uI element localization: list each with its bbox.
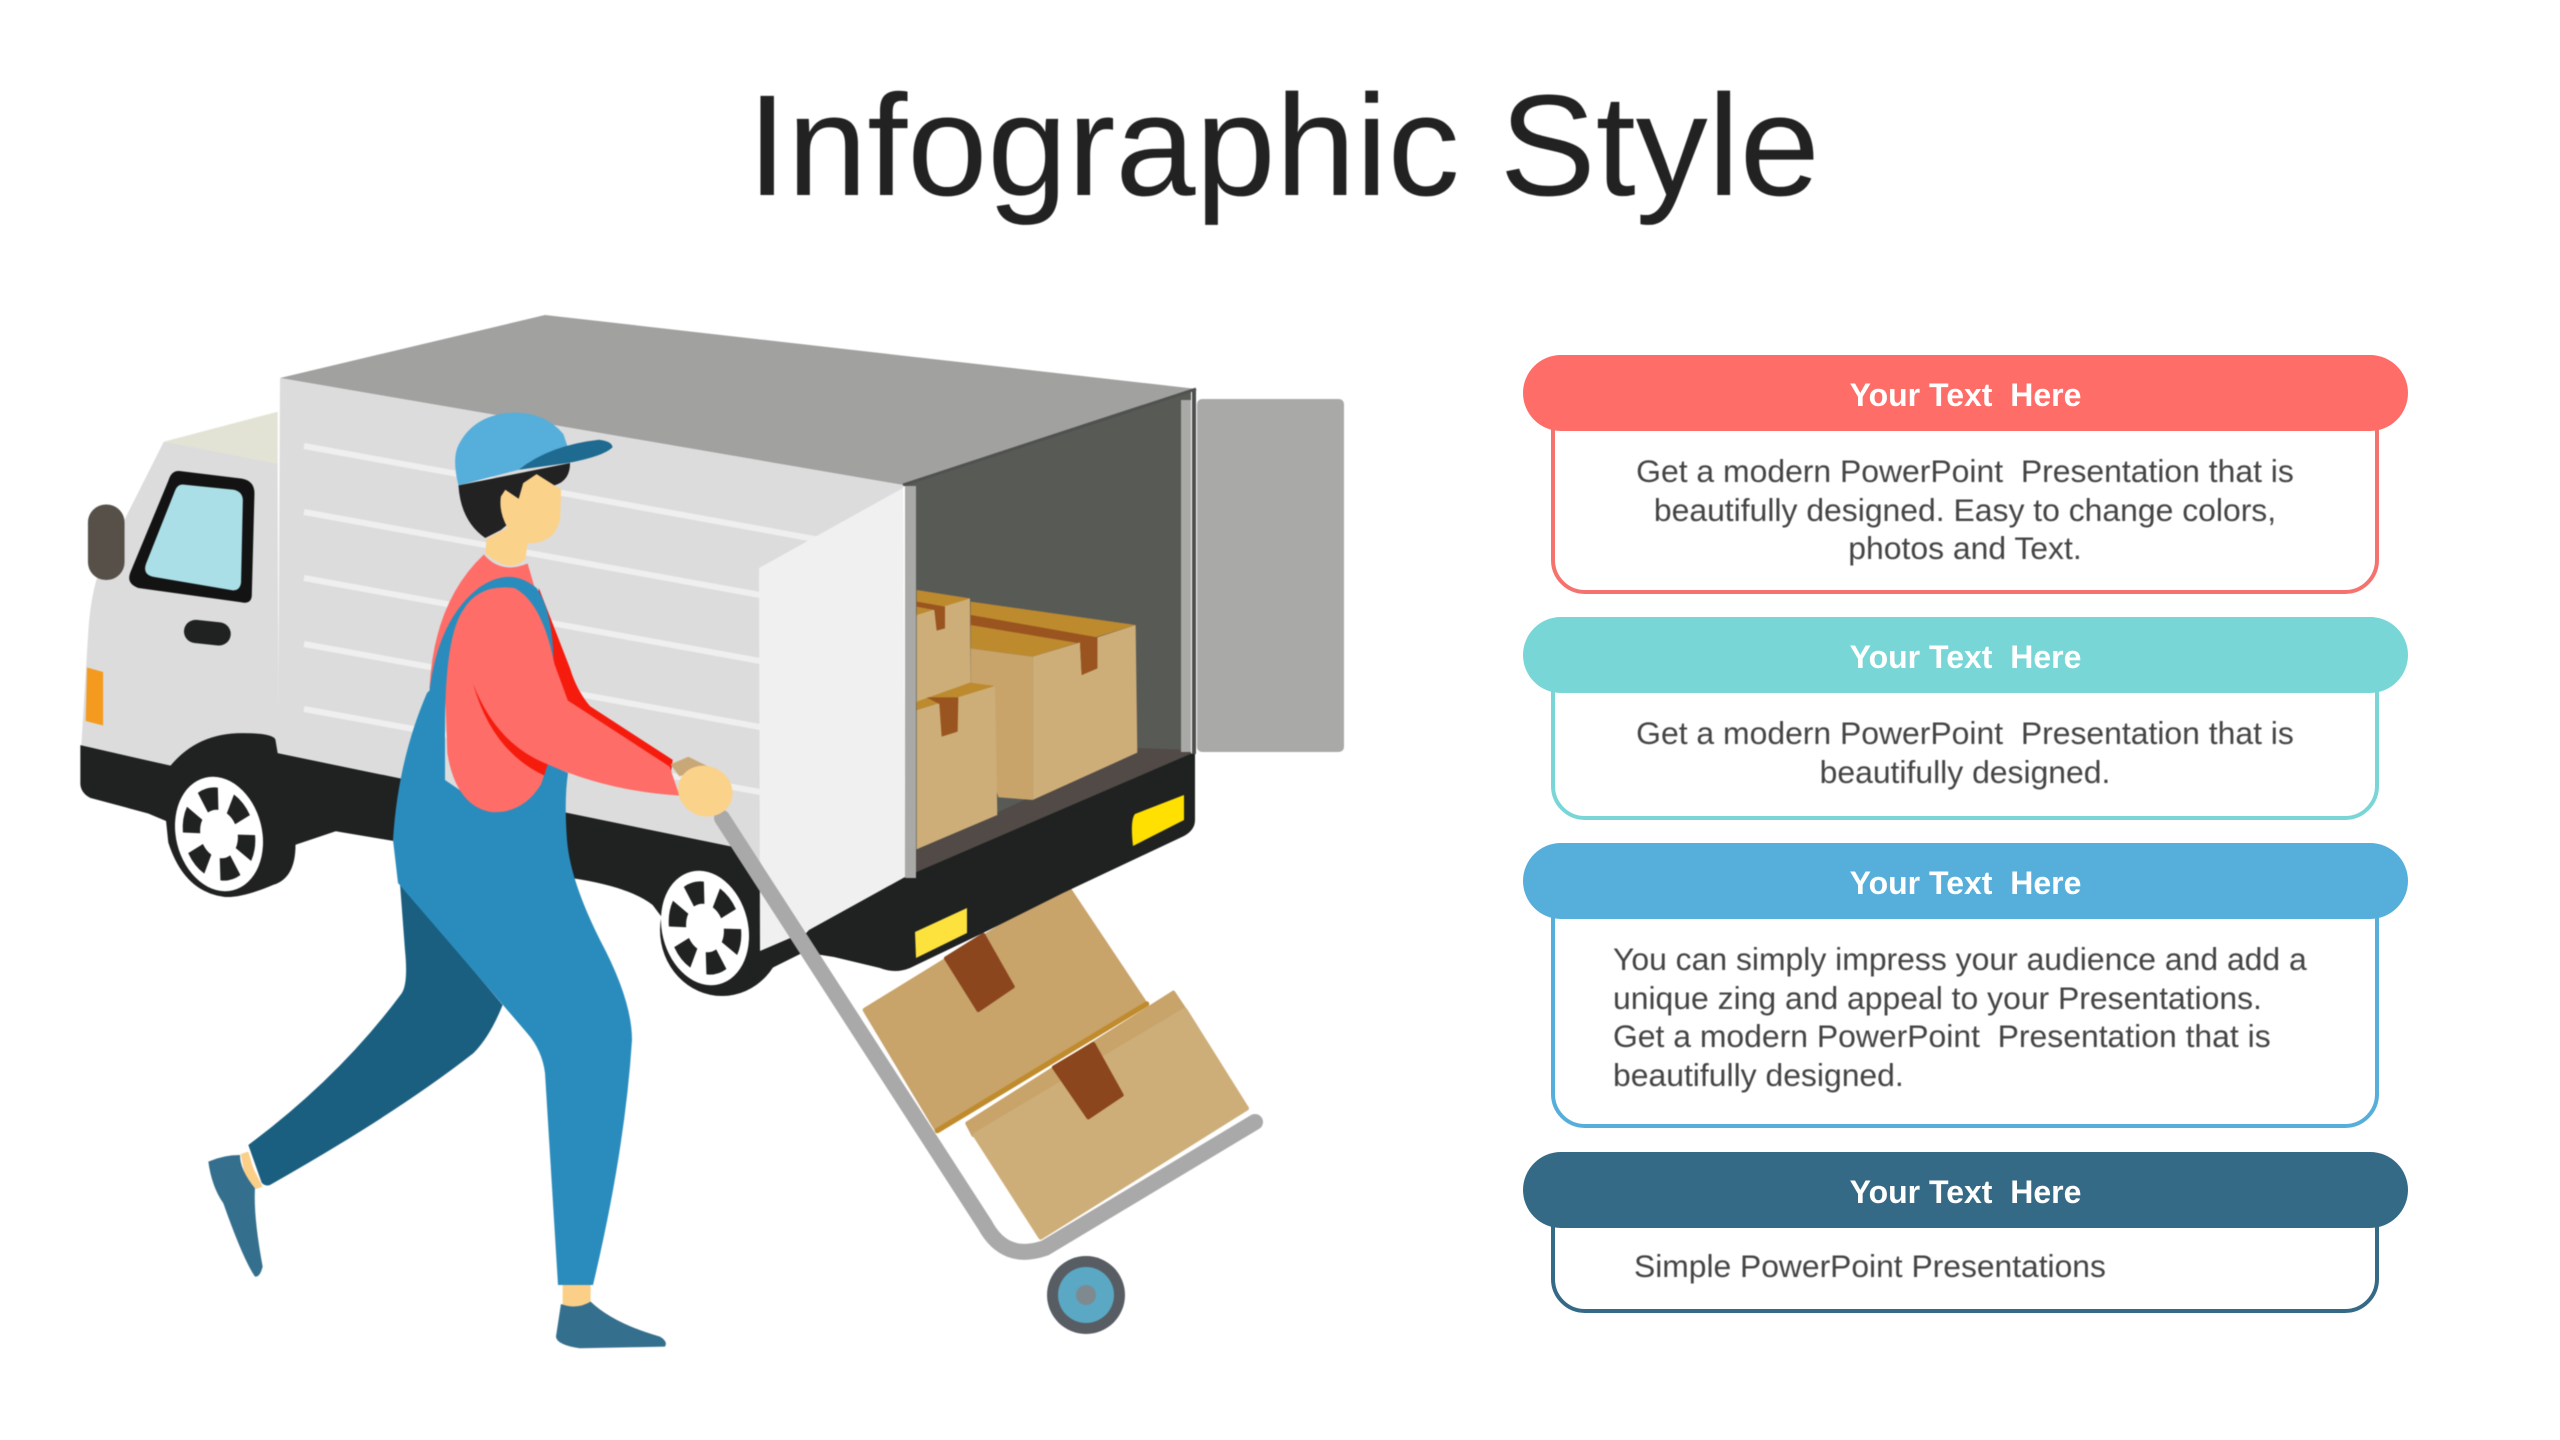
door panel (759, 488, 905, 951)
navy header: Your Text Here (1850, 1174, 2081, 1210)
blue body box (1551, 881, 2379, 1128)
truck cab (81, 412, 279, 767)
open rear door (1197, 399, 1344, 752)
truck roof (280, 315, 1197, 485)
back hand (670, 757, 708, 776)
panel: navy card (1523, 1152, 2408, 1313)
bottom carton (967, 993, 1247, 1237)
teal header (1523, 617, 2408, 693)
boxes on hand truck (865, 886, 1247, 1237)
front chassis band (80, 733, 809, 994)
lower left box (917, 683, 997, 849)
truck side panel (278, 378, 905, 950)
door handle (183, 619, 232, 647)
blue body text: You can simply impress your audience and add a unique zing and appeal to your Presentations. Get a modern PowerPoint Presentation that is beautifully designed. (1613, 941, 2307, 1092)
face (485, 474, 561, 566)
title: Infographic Style (747, 65, 1820, 226)
teal header: Your Text Here (1850, 639, 2081, 675)
chassis and tyres (80, 733, 809, 996)
cap (455, 413, 568, 485)
cab window (129, 471, 254, 603)
navy body box (1551, 1190, 2379, 1313)
worker (208, 413, 741, 1348)
reflector right (1132, 795, 1184, 846)
teal body text: Get a modern PowerPoint Presentation that is beautifully designed. (1636, 715, 2294, 790)
back leg (208, 883, 666, 1348)
door frame strips (903, 389, 1196, 878)
upper left box (917, 590, 971, 703)
reflector left (915, 908, 967, 958)
front hand (670, 757, 741, 825)
red header: Your Text Here (1850, 377, 2081, 413)
red body box (1551, 393, 2379, 594)
blue header: Your Text Here (1850, 865, 2081, 901)
wheel front (163, 767, 275, 901)
cap bill (519, 440, 612, 470)
side mirror (88, 505, 125, 580)
cargo interior (905, 391, 1191, 884)
back shoe (208, 1155, 263, 1277)
front orange light (86, 667, 103, 726)
panel: red card (1523, 355, 2408, 594)
truck body (81, 315, 1197, 950)
hand truck frame (722, 818, 1255, 1252)
rear tyre (660, 864, 784, 996)
top carton (865, 886, 1145, 1128)
side panel stripes (304, 446, 820, 792)
tape bottom (1054, 1044, 1122, 1117)
front shoe (556, 1302, 666, 1348)
blue header (1523, 843, 2408, 919)
wheel rear (649, 861, 761, 995)
arm shadow (537, 588, 673, 776)
shirt crease (473, 684, 548, 776)
upper body (429, 413, 741, 825)
navy body text: Simple PowerPoint Presentations (1634, 1248, 2106, 1284)
red body text: Get a modern PowerPoint Presentation that is beautifully designed. Easy to change colors, photos and Text. (1636, 453, 2294, 566)
tape top (946, 935, 1013, 1010)
shirt (429, 555, 679, 812)
front ankle (563, 1283, 591, 1307)
rear bumper (790, 752, 1195, 971)
panel: blue card (1523, 843, 2408, 1128)
overalls (393, 682, 632, 1285)
teal body box (1551, 655, 2379, 820)
overall strap (429, 577, 554, 726)
hand truck wheel (1047, 1256, 1125, 1334)
boxes inside truck (917, 590, 1137, 849)
panel: teal card (1523, 617, 2408, 820)
back ankle (241, 1152, 263, 1189)
red header (1523, 355, 2408, 431)
navy header (1523, 1152, 2408, 1228)
carton seam (937, 1004, 1147, 1131)
large box (971, 602, 1137, 800)
hair (458, 463, 570, 538)
